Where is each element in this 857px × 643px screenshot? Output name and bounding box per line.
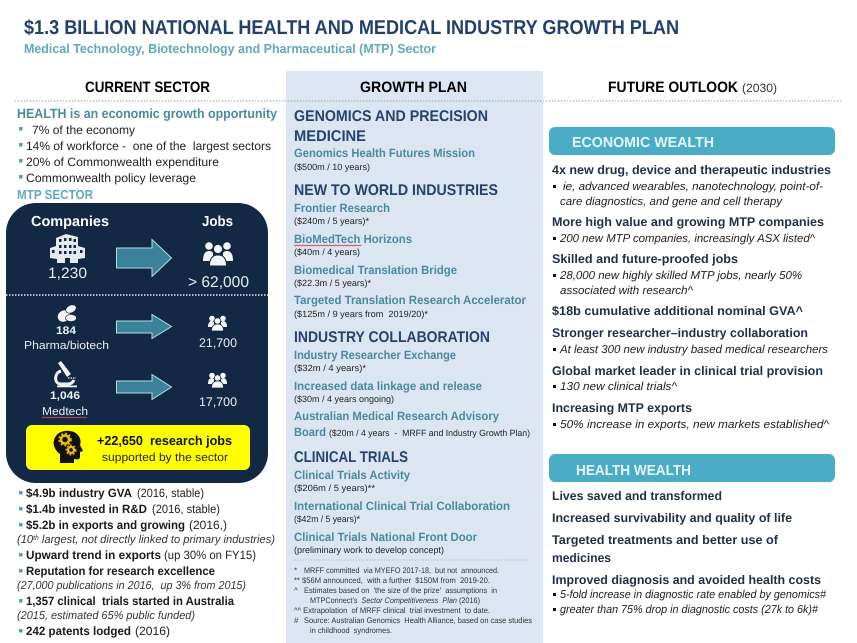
label: pharma/biotech: Pharma/biotech xyxy=(24,340,109,352)
footnotes: ^ xyxy=(294,586,298,595)
economic wealth list: 50% increase in exports, new markets established^ xyxy=(560,419,830,431)
sector facts list: (2016, stable) xyxy=(137,486,204,500)
sector facts list: (2016, stable) xyxy=(152,502,220,516)
footnotes: MTPConnect's Sector Competitiveness Plan (2016) xyxy=(310,596,480,605)
sector facts list xyxy=(17,486,275,638)
subtitle: Medical Technology, Biotechnology and Pharmaceutical (MTP) Sector xyxy=(24,41,436,56)
section: new to world industries: BioMedTech Horizons xyxy=(294,232,412,246)
panel: MTP sector stats xyxy=(6,203,268,483)
icon: people small xyxy=(208,316,227,331)
sector facts list: largest, not directly linked to primary industries) xyxy=(39,534,275,546)
panel: growth plan background xyxy=(286,71,543,643)
heading: MTP sector: MTP SECTOR xyxy=(17,187,94,202)
icon: people xyxy=(203,242,233,266)
section: industry collaboration: Increased data linkage and release xyxy=(294,379,482,393)
section: new to world industries xyxy=(294,182,526,319)
economic wealth list: ie, advanced wearables, nanotechnology, point-of- xyxy=(563,181,823,193)
text: research jobs: +22,650 research jobs xyxy=(97,433,232,448)
value: 184 pharma companies: 184 xyxy=(56,325,77,337)
economic wealth list: care diagnostics, and gene and cell therapy xyxy=(560,196,783,208)
callout: research jobs xyxy=(26,425,250,470)
icon: people small xyxy=(208,373,227,388)
section: genomics and precision medicine: GENOMICS AND PRECISION xyxy=(294,108,488,125)
health wealth list: Increased survivability and quality of life xyxy=(552,511,792,525)
section: clinical trials: Clinical Trials National Front Door xyxy=(294,530,477,544)
section: genomics and precision medicine xyxy=(294,108,488,172)
economic wealth list: At least 300 new industry based medical researchers xyxy=(559,344,828,356)
health wealth list: 5-fold increase in diagnostic rate enabled by genomics# xyxy=(560,589,827,601)
panel: growth plan xyxy=(294,79,532,635)
section: genomics and precision medicine: MEDICINE xyxy=(294,128,366,145)
economic wealth list: Increasing MTP exports xyxy=(552,401,692,415)
section: industry collaboration: Australian Medical Research Advisory xyxy=(294,409,499,423)
section: new to world industries: ($22.3m / 5 years)* xyxy=(294,278,372,288)
sector facts list: th xyxy=(33,534,39,542)
sector facts list: Upward trend in exports xyxy=(26,548,161,562)
footnotes xyxy=(294,566,532,635)
icon: building xyxy=(50,234,85,263)
sector facts list: Reputation for research excellence xyxy=(26,564,215,578)
sector facts list: (2016,) xyxy=(189,518,227,532)
economic wealth list: Global market leader in clinical trial provision xyxy=(552,364,823,378)
economic wealth list: 4x new drug, device and therapeutic industries xyxy=(552,163,831,177)
footnotes: ** $56M announced, with a further $150M from 2019-20. xyxy=(294,576,490,585)
value: 1,230 companies: 1,230 xyxy=(48,265,87,282)
section: industry collaboration: Board xyxy=(294,425,326,439)
footnotes: in childhood syndromes. xyxy=(310,626,392,635)
section: clinical trials: ($206m / 5 years)** xyxy=(294,483,376,493)
sector facts list: (2016) xyxy=(135,624,170,638)
section: new to world industries: NEW TO WORLD INDUSTRIES xyxy=(294,182,498,199)
icon: head with gears xyxy=(54,431,83,463)
health wealth list: greater than 75% drop in diagnostic costs (27k to 6k)# xyxy=(560,604,819,616)
arrow: medtech to jobs xyxy=(116,374,172,400)
economic wealth list: 130 new clinical trials^ xyxy=(560,381,678,393)
icon: microscope xyxy=(56,361,77,387)
value: 1,046 medtech companies: 1,046 xyxy=(50,390,80,402)
label: companies: Companies xyxy=(31,214,109,230)
value: 21,700 jobs: 21,700 xyxy=(199,336,237,350)
title: $1.3 BILLION NATIONAL HEALTH AND MEDICAL INDUSTRY GROWTH PLAN xyxy=(24,17,679,39)
economic wealth list: Stronger researcher–industry collaboration xyxy=(552,326,808,340)
banner: economic wealth xyxy=(549,127,835,155)
heading: future outlook: FUTURE OUTLOOK xyxy=(608,79,738,96)
health wealth list: medicines xyxy=(552,551,611,565)
economic wealth list xyxy=(552,163,831,431)
footnotes: MRFF committed via MYEFO 2017-18, but not announced. xyxy=(304,566,499,575)
section: industry collaboration: ($32m / 4 years)* xyxy=(294,363,367,373)
panel: current sector xyxy=(6,79,277,638)
sector facts list: 1,357 clinical trials started in Australia xyxy=(26,594,234,608)
banner: health wealth xyxy=(549,454,835,482)
sector facts list: 242 patents lodged xyxy=(26,624,131,638)
health bullet list: 14% of workforce - one of the largest sectors xyxy=(26,139,271,153)
text: supported by the sector: supported by the sector xyxy=(102,452,228,464)
footnotes: # xyxy=(294,616,299,625)
health bullet list: 20% of Commonwealth expenditure xyxy=(26,155,219,169)
heading: health opportunity: HEALTH is an economic growth opportunity xyxy=(17,106,277,121)
footnotes: Source: Australian Genomics Health Alliance, based on case studies xyxy=(304,616,532,625)
section: new to world industries: Frontier Research xyxy=(294,201,390,215)
section: clinical trials: ($42m / 5 years)* xyxy=(294,514,360,524)
sector facts list: (27,000 publications in 2016, up 3% from 2015) xyxy=(17,580,246,592)
panel: future outlook xyxy=(549,79,835,616)
section: industry collaboration: INDUSTRY COLLABORATION xyxy=(294,329,490,346)
heading: current sector: CURRENT SECTOR xyxy=(85,79,210,96)
section: clinical trials xyxy=(294,449,510,555)
banner: health wealth: HEALTH WEALTH xyxy=(576,463,691,479)
sector facts list: (10 xyxy=(17,534,34,546)
section: genomics and precision medicine: ($500m / 10 years) xyxy=(294,162,370,172)
health bullet list xyxy=(19,123,271,185)
sector facts list: (up 30% on FY15) xyxy=(164,548,256,562)
value: 17,700 jobs: 17,700 xyxy=(199,395,237,409)
section: industry collaboration: ($20m / 4 years - MRFF and Industry Growth Plan) xyxy=(329,428,530,438)
section: new to world industries: Targeted Translation Research Accelerator xyxy=(294,293,526,307)
economic wealth list: associated with research^ xyxy=(560,285,694,297)
footnotes: * xyxy=(294,566,297,575)
value: over 62,000 jobs: > 62,000 xyxy=(188,274,249,291)
health wealth list: Targeted treatments and better use of xyxy=(552,533,779,547)
section: industry collaboration: ($30m / 4 years ongoing) xyxy=(294,394,394,404)
section: clinical trials: Clinical Trials Activity xyxy=(294,468,410,482)
arrow: pharma to jobs xyxy=(116,314,172,338)
health bullet list: Commonwealth policy leverage xyxy=(26,171,196,185)
health wealth list: Lives saved and transformed xyxy=(552,489,722,503)
sector facts list: $5.2b in exports and growing xyxy=(26,518,185,532)
health wealth list: Improved diagnosis and avoided health costs xyxy=(552,573,821,587)
section: new to world industries: Biomedical Translation Bridge xyxy=(294,263,457,277)
section: genomics and precision medicine: Genomics Health Futures Mission xyxy=(294,146,475,160)
economic wealth list: Skilled and future-proofed jobs xyxy=(552,252,738,266)
sector facts list: $1.4b invested in R&D xyxy=(26,502,147,516)
economic wealth list: More high value and growing MTP companies xyxy=(552,215,824,229)
heading: future outlook: (2030) xyxy=(742,81,777,95)
arrow: companies to jobs xyxy=(116,240,172,276)
label: jobs: Jobs xyxy=(202,214,233,230)
section: clinical trials: CLINICAL TRIALS xyxy=(294,449,408,466)
section: industry collaboration xyxy=(294,329,530,439)
health bullet list: 7% of the economy xyxy=(32,123,135,137)
footnotes: Estimates based on 'the size of the prize' assumptions in xyxy=(304,586,497,595)
section: new to world industries: ($40m / 4 years) xyxy=(294,247,360,257)
section: new to world industries: ($240m / 5 years)* xyxy=(294,216,370,226)
heading: growth plan: GROWTH PLAN xyxy=(360,79,467,96)
section: clinical trials: International Clinical Trial Collaboration xyxy=(294,499,510,513)
economic wealth list: $18b cumulative additional nominal GVA^ xyxy=(552,304,804,318)
icon: pills xyxy=(56,303,78,324)
sector facts list: $4.9b industry GVA xyxy=(26,486,132,500)
health wealth list xyxy=(552,489,827,616)
economic wealth list: 28,000 new highly skilled MTP jobs, nearly 50% xyxy=(559,270,802,282)
section: clinical trials: (preliminary work to develop concept) xyxy=(294,545,444,555)
label: medtech: Medtech xyxy=(42,406,88,418)
sector facts list: (2015, estimated 65% public funded) xyxy=(17,610,195,622)
section: new to world industries: ($125m / 9 years from 2019/20)* xyxy=(294,309,428,319)
section: industry collaboration: Industry Researcher Exchange xyxy=(294,348,456,362)
economic wealth list: 200 new MTP companies, increasingly ASX listed^ xyxy=(559,233,816,245)
banner: economic wealth: ECONOMIC WEALTH xyxy=(572,135,714,151)
footnotes: ^^ Extrapolation of MRFF clinical trial investment to date. xyxy=(294,606,490,615)
